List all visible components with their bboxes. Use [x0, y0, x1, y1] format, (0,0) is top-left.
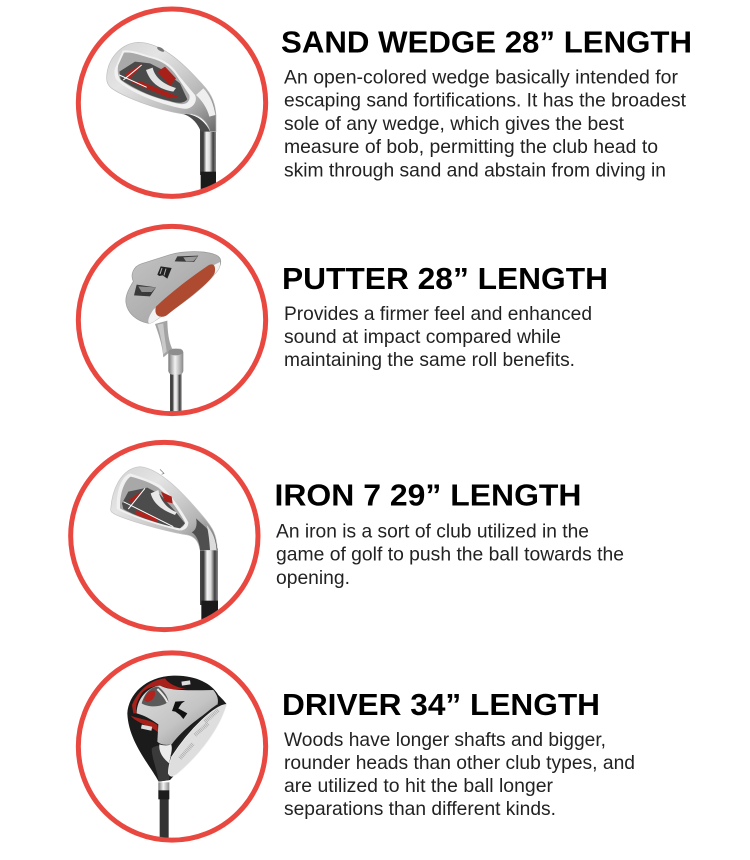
text block: sand wedge description: An open-colored wedge basically intended for — [284, 66, 679, 88]
text block: driver description — [284, 729, 635, 820]
text block: iron description: game of golf to push the ball towards the — [276, 544, 624, 566]
text block: driver description: separations than different kinds. — [284, 798, 556, 820]
text block: putter description: Provides a firmer feel and enhanced — [284, 303, 592, 325]
panel: driver — [78, 653, 635, 843]
text block: driver description: Woods have longer shafts and bigger, — [284, 729, 606, 751]
heading: iron 7: IRON 7 29” LENGTH — [274, 479, 582, 513]
text block: iron description — [276, 520, 624, 589]
heading: sand wedge: SAND WEDGE 28” LENGTH — [281, 26, 692, 60]
icon: sand wedge club in red circle — [78, 9, 266, 196]
icon: putter club in red circle — [78, 226, 266, 415]
panel: putter — [78, 226, 608, 415]
panel: iron 7 — [71, 442, 624, 630]
text block: iron description: An iron is a sort of club utilized in the — [276, 520, 589, 542]
text block: driver description: rounder heads than other club types, and — [284, 752, 635, 774]
text block: putter description — [284, 303, 592, 371]
text block: sand wedge description: measure of bob, permitting the club head to — [284, 136, 658, 158]
text block: putter description: sound at impact compared while — [284, 326, 561, 348]
heading: driver: DRIVER 34” LENGTH — [282, 688, 600, 722]
icon: driver club in red circle — [78, 653, 266, 843]
text block: driver description: are utilized to hit the ball longer — [284, 775, 553, 797]
text block: sand wedge description: sole of any wedge, which gives the best — [284, 113, 625, 135]
icon: iron club in red circle — [71, 442, 258, 630]
panel: sand wedge — [78, 9, 692, 196]
text block: sand wedge description — [284, 66, 687, 182]
text block: sand wedge description: escaping sand fortifications. It has the broadest — [284, 90, 687, 112]
text block: iron description: opening. — [276, 567, 350, 589]
text block: putter description: maintaining the same roll benefits. — [284, 349, 575, 371]
heading: putter: PUTTER 28” LENGTH — [282, 262, 608, 296]
text block: sand wedge description: skim through sand and abstain from diving in — [284, 160, 666, 182]
